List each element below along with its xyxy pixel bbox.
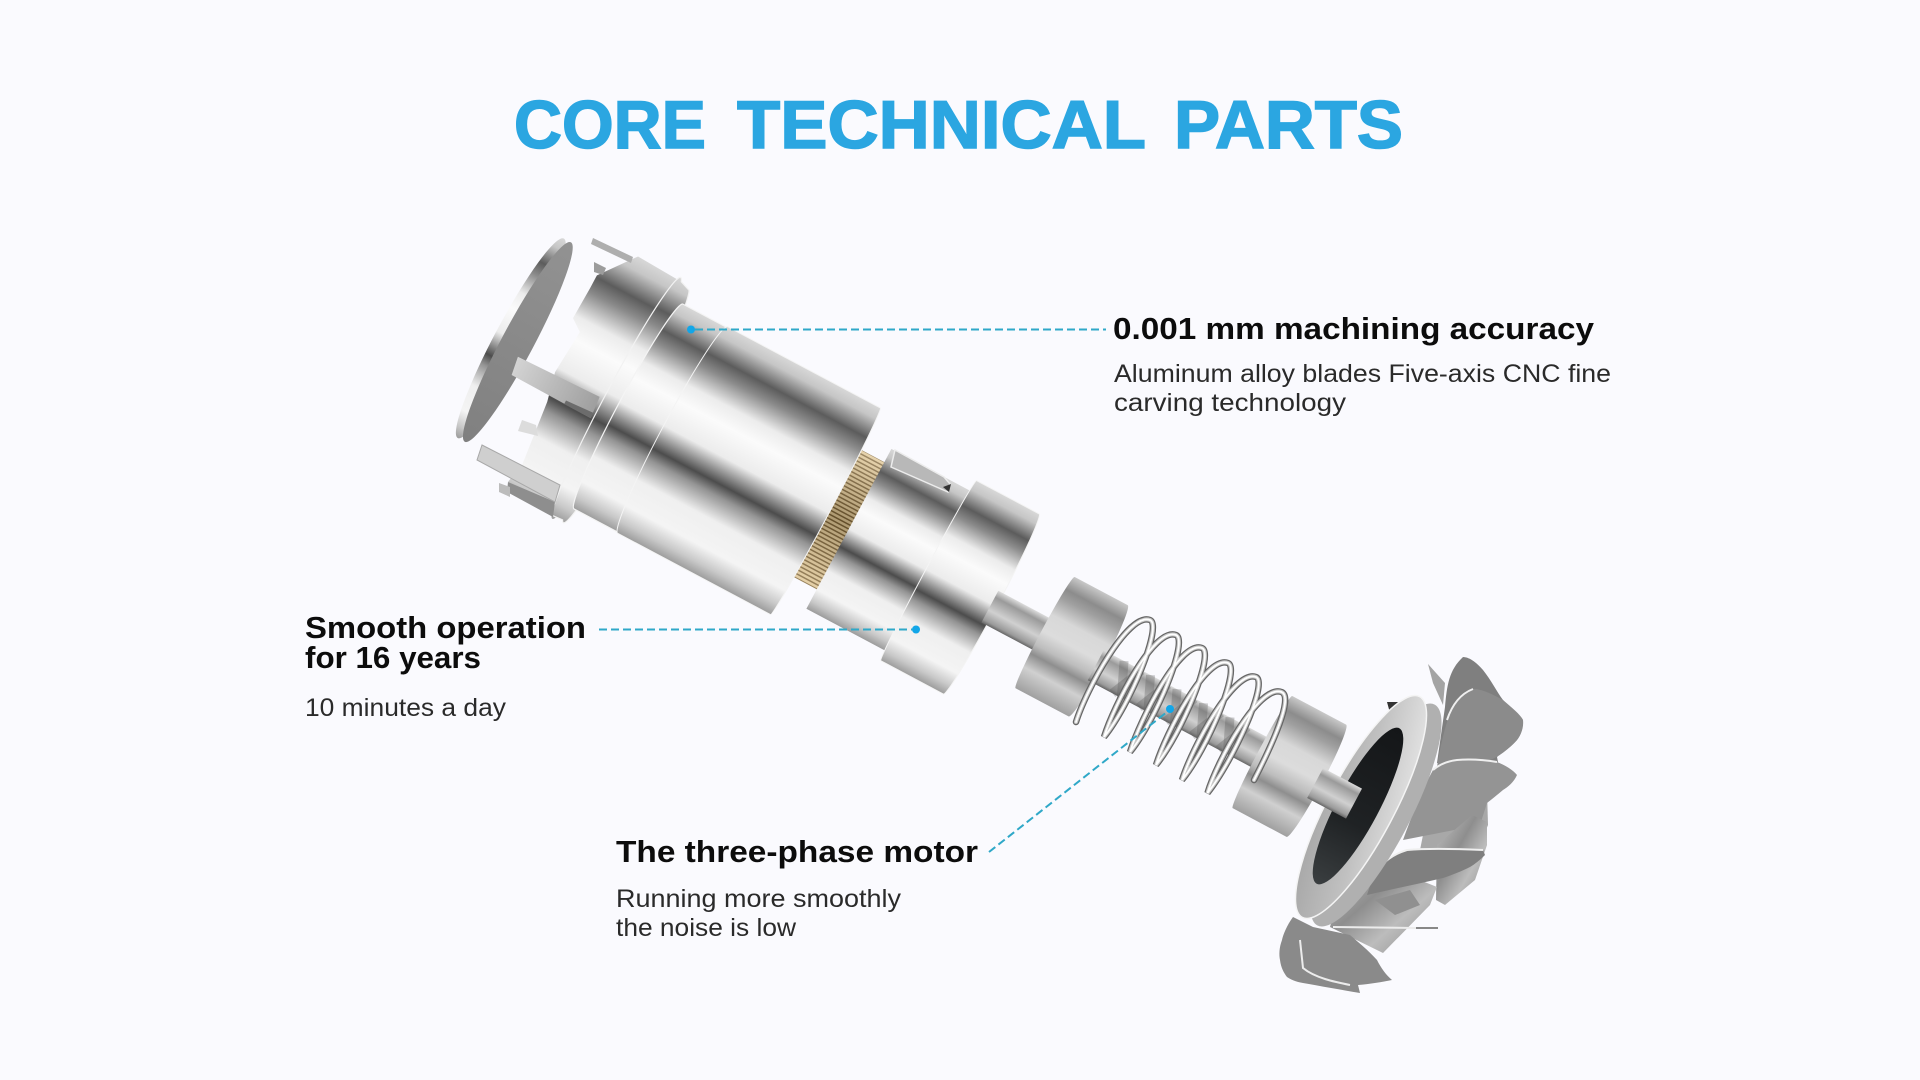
coil spring [1076,619,1285,793]
rear body [806,449,978,655]
main cylinder [609,322,884,616]
text block: smooth operation: for 16 years [305,640,481,675]
title: TECHNICAL [737,87,1146,163]
disc rim [444,231,578,446]
cap tabs [477,238,633,517]
callout line: three-phase motor [989,705,1174,852]
impeller shaft [1307,768,1362,819]
flange [878,479,1044,697]
text block: machining accuracy: carving technology [1114,389,1347,417]
callout line: smooth operation [599,626,920,634]
impeller ring outer edge [1288,689,1464,941]
title: PARTS [1174,87,1403,163]
cap body [485,243,691,525]
cap bar [509,354,601,418]
text block: smooth operation: Smooth operation [305,610,586,645]
small collar two [1229,694,1351,840]
text block: machining accuracy: Aluminum alloy blades Five-axis CNC fine [1114,360,1611,388]
impeller hole [1298,718,1418,894]
text block: three-phase motor [616,834,978,942]
impeller ring face [1273,681,1449,933]
neck section [565,299,739,539]
small collar one [1012,575,1133,719]
brass gear [781,443,898,597]
title: CORE [514,87,706,163]
title [514,87,1403,163]
spring shaft coil shadows [1108,661,1248,757]
text block: three-phase motor: the noise is low [616,914,797,942]
callout line: machining accuracy [687,326,1106,334]
output shaft [981,591,1064,657]
impeller with blades [1273,657,1523,993]
motor assembly cylinders [431,213,1424,914]
disc face [451,235,585,449]
text block: three-phase motor: The three-phase motor [616,834,978,869]
text block: machining accuracy [1113,311,1611,417]
text block: three-phase motor: Running more smoothly [616,885,902,913]
cap ring [543,272,701,528]
text block: smooth operation: 10 minutes a day [305,694,507,722]
text block: smooth operation [305,610,586,722]
text block: machining accuracy: 0.001 mm machining accuracy [1113,311,1595,346]
spring shaft [1088,650,1273,770]
slot on rear body [891,450,951,492]
